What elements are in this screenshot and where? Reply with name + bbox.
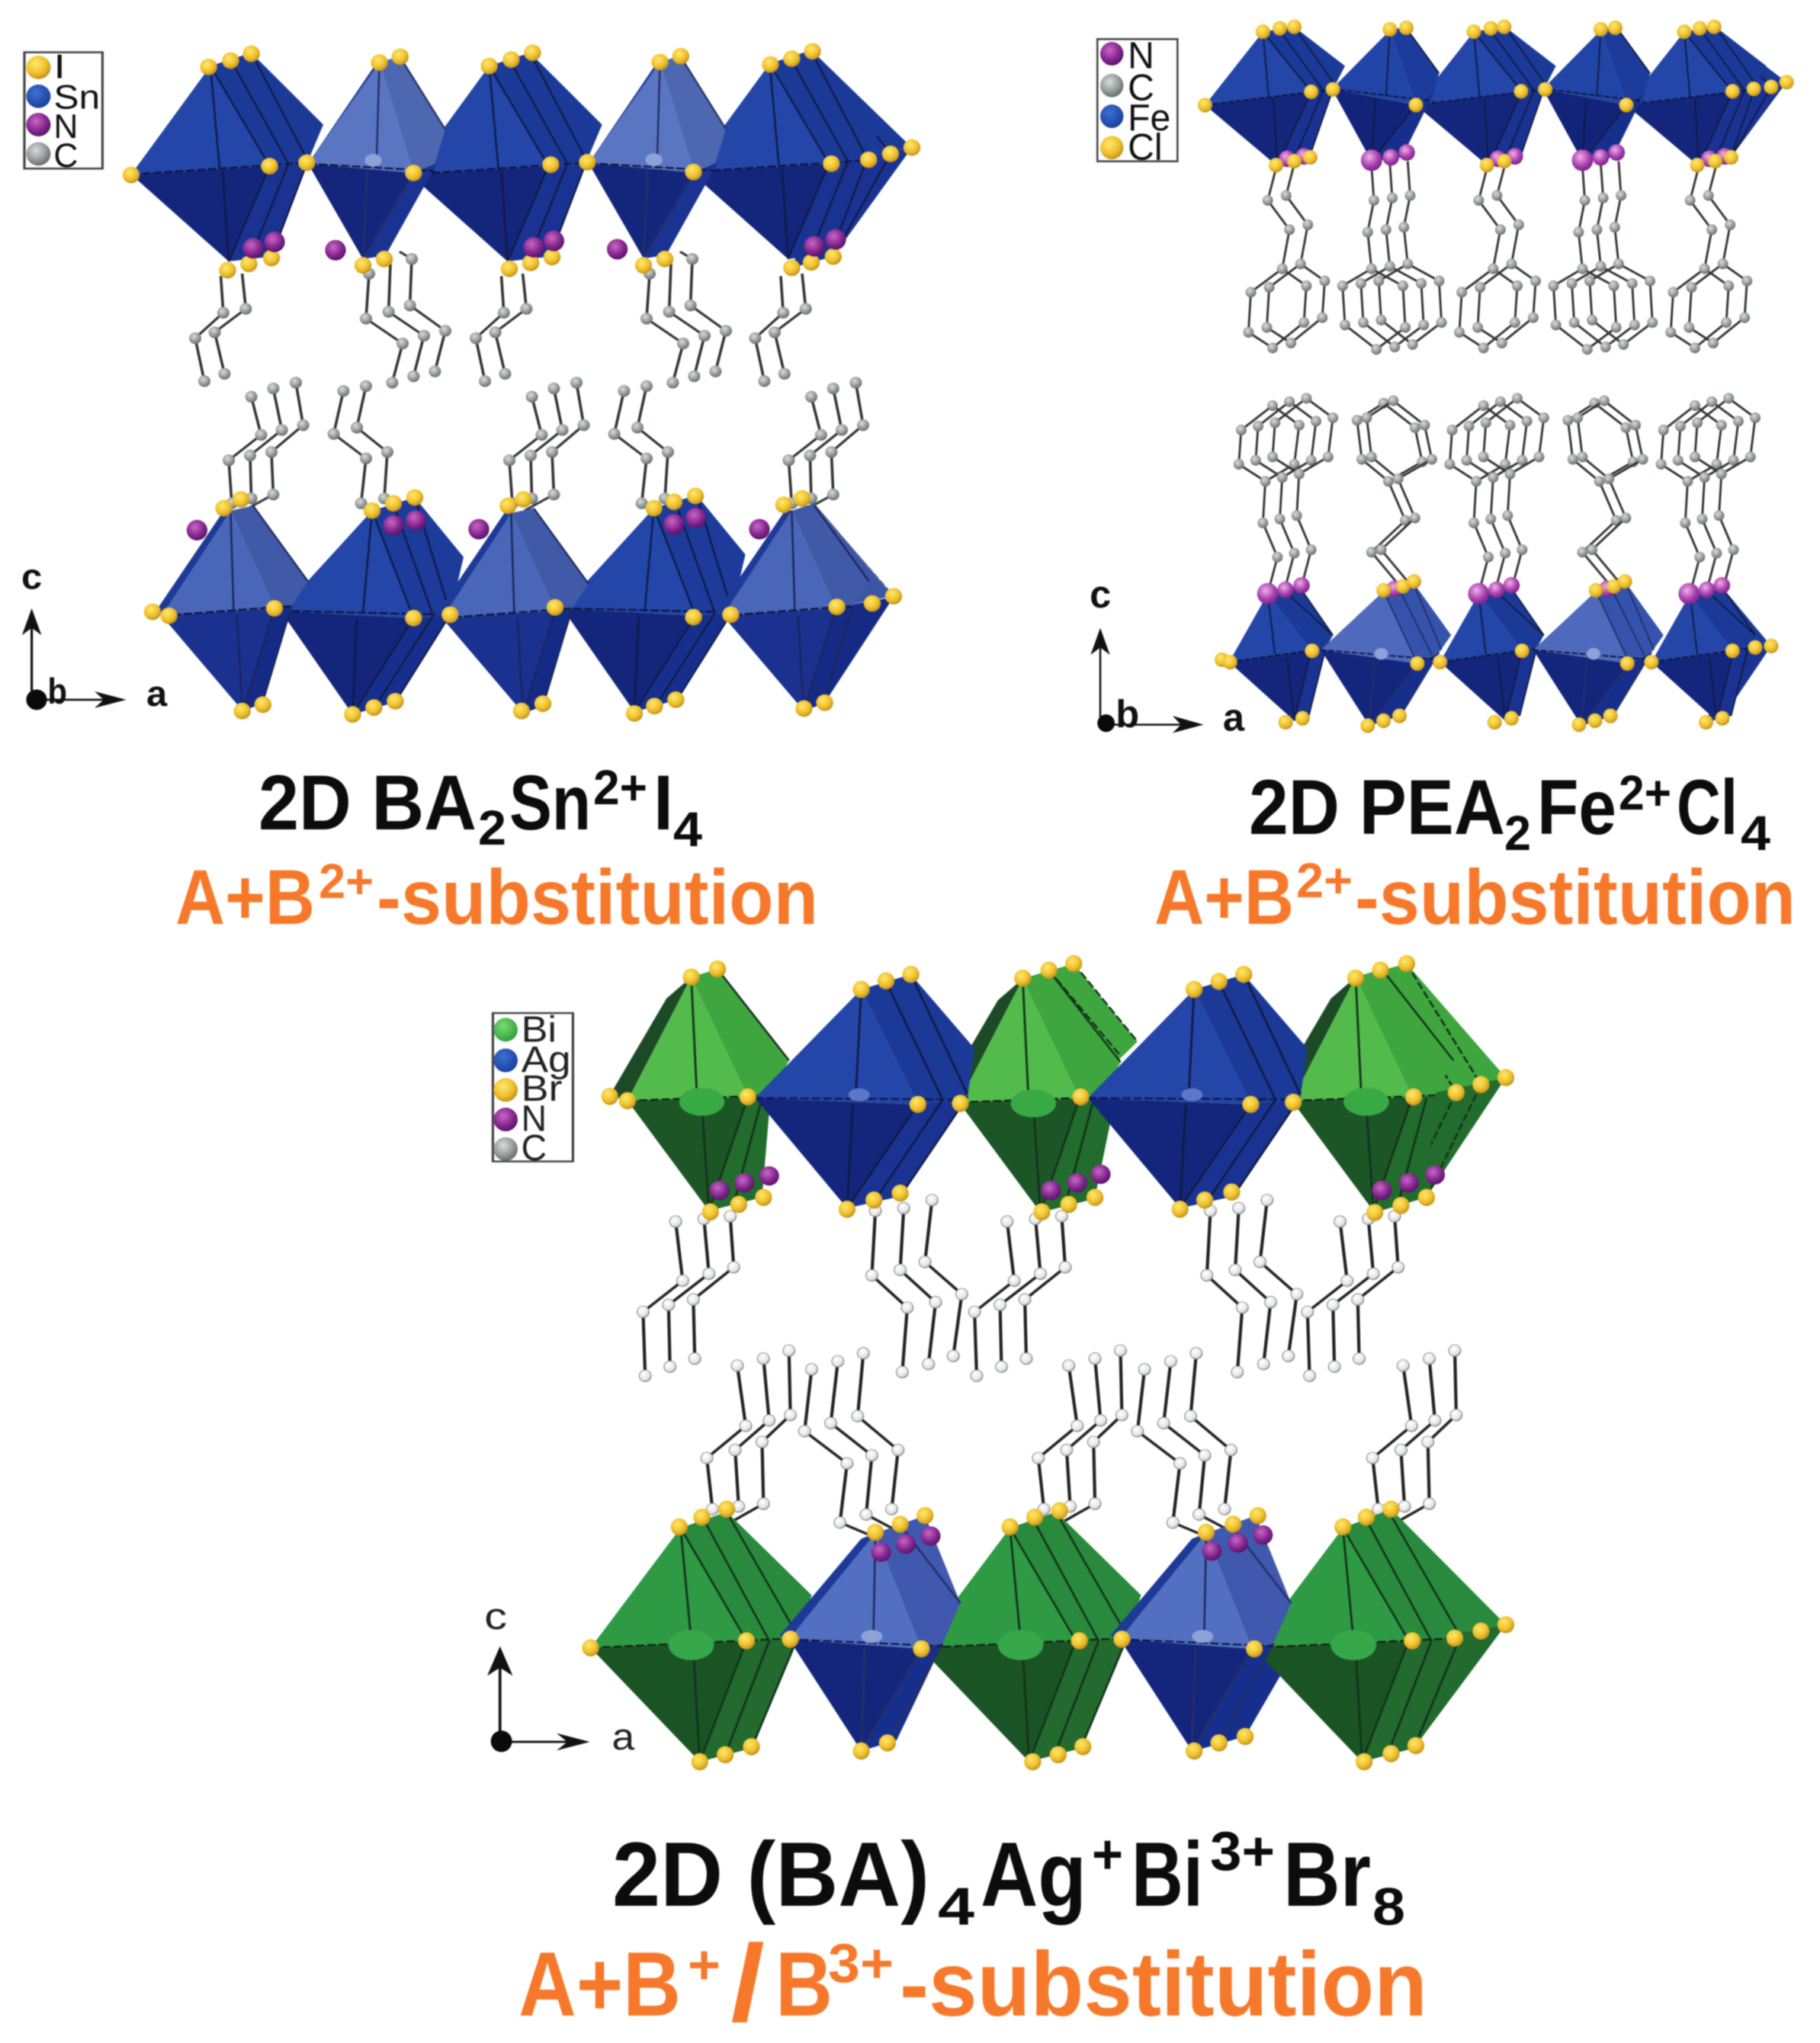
subheading: A+B2+-substitution (left) — [175, 854, 818, 941]
octahedra top row — [610, 964, 1506, 1213]
heading: 2D BA2Sn2+I4: 2+ — [593, 760, 647, 815]
subheading: A+B2+-substitution (right): -substitution — [1355, 854, 1796, 941]
subheading: A+B2+-substitution (right) — [1154, 853, 1796, 941]
legend: I Sn N C: I — [53, 47, 66, 85]
heading: 2D (BA)4Ag+Bi3+Br8: Br — [1283, 1823, 1371, 1926]
legend: N C Fe Cl: Cl — [1128, 127, 1163, 168]
heading: 2D BA2Sn2+I4: 2 — [478, 800, 506, 855]
octahedra bottom row — [591, 1509, 1506, 1762]
legend: Bi Ag Br N C: Bi — [522, 1009, 557, 1050]
legend: N C Fe Cl: C — [1128, 67, 1154, 108]
heading: 2D (BA)4Ag+Bi3+Br8: 8 — [1372, 1877, 1405, 1936]
heading: 2D (BA)4Ag+Bi3+Br8: Ag — [981, 1823, 1087, 1926]
octahedra bottom row — [1229, 582, 1771, 726]
nitrogen atoms — [710, 1165, 1445, 1562]
legend: I Sn N C: N — [53, 107, 78, 145]
butylammonium chains — [637, 1195, 1462, 1536]
subheading: A+B2+-substitution (left): -substitution — [377, 854, 818, 941]
axes: c, a: c — [484, 1596, 507, 1637]
axes: c, b, a: a — [146, 674, 168, 714]
heading: 2D PEA2Fe2+Cl4 — [1249, 764, 1770, 861]
subheading: A+B+/B3+-substitution: 3+ — [828, 1933, 894, 1994]
axes: c, a: a — [612, 1716, 635, 1758]
heading: 2D PEA2Fe2+Cl4: 2D PEA — [1249, 764, 1505, 851]
heading: 2D BA2Sn2+I4: 2D BA — [258, 759, 477, 846]
chlorine atoms — [1198, 20, 1794, 733]
subheading: A+B+/B3+-substitution — [518, 1921, 1427, 2043]
panel: BA4AgBiBr8 crystal structure — [484, 955, 1514, 1770]
heading: 2D (BA)4Ag+Bi3+Br8: 2D (BA) — [612, 1823, 929, 1926]
nitrogen atoms — [187, 229, 846, 540]
legend: Bi Ag Br N C — [493, 1009, 573, 1168]
octahedra top row — [1205, 27, 1786, 166]
legend: N C Fe Cl: N — [1128, 35, 1154, 77]
heading: 2D (BA)4Ag+Bi3+Br8: 4 — [938, 1877, 974, 1936]
bromine atoms — [583, 955, 1514, 1770]
octahedra bottom row — [154, 495, 894, 714]
panel: PEA2FeCl4 crystal structure — [1090, 20, 1794, 739]
heading: 2D PEA2Fe2+Cl4: Cl — [1677, 764, 1738, 851]
heading: 2D (BA)4Ag+Bi3+Br8: 3+ — [1210, 1821, 1275, 1882]
axes: c, b, a: b — [1115, 692, 1139, 736]
panel: BA2SnI4 crystal structure — [21, 43, 920, 723]
subheading: A+B2+-substitution (right): 2+ — [1296, 853, 1353, 908]
legend: Bi Ag Br N C: C — [522, 1127, 547, 1168]
legend: I Sn N C: C — [53, 136, 78, 175]
heading: 2D PEA2Fe2+Cl4: 2+ — [1619, 765, 1671, 820]
axes: c, b, a: a — [1223, 695, 1245, 739]
axes: c, b, a: b — [47, 672, 67, 712]
axes: c, a — [484, 1596, 635, 1758]
organic chains — [189, 252, 869, 511]
axes: c, b, a — [1090, 572, 1245, 739]
heading: 2D PEA2Fe2+Cl4: 4 — [1741, 806, 1770, 861]
axes: c, b, a: c — [21, 556, 42, 597]
nitrogen atoms — [1257, 144, 1733, 605]
heading: 2D BA2Sn2+I4 — [258, 759, 702, 857]
legend: I Sn N C: Sn — [53, 78, 100, 116]
subheading: A+B+/B3+-substitution: -substitution — [900, 1933, 1427, 2035]
heading: 2D PEA2Fe2+Cl4: 2 — [1504, 806, 1531, 861]
octahedra top row — [131, 50, 912, 268]
heading: 2D PEA2Fe2+Cl4: Fe — [1537, 764, 1616, 851]
legend: Bi Ag Br N C: N — [522, 1098, 547, 1139]
legend: I Sn N C — [24, 47, 102, 175]
subheading: A+B2+-substitution (right): A+B — [1154, 854, 1294, 941]
iodine atoms — [123, 43, 920, 723]
heading: 2D BA2Sn2+I4: Sn — [509, 759, 591, 846]
legend: Bi Ag Br N C: Ag — [522, 1038, 571, 1079]
legend: N C Fe Cl: Fe — [1128, 98, 1170, 139]
axes: c, b, a — [21, 556, 168, 714]
heading: 2D BA2Sn2+I4: I — [653, 759, 673, 846]
axes: c, b, a: c — [1090, 572, 1111, 616]
subheading: A+B2+-substitution (left): 2+ — [319, 854, 374, 909]
subheading: A+B+/B3+-substitution: A+B — [518, 1933, 681, 2035]
subheading: A+B+/B3+-substitution: + — [688, 1935, 721, 1996]
subheading: A+B2+-substitution (left): A+B — [175, 854, 315, 941]
heading: 2D (BA)4Ag+Bi3+Br8: Bi — [1131, 1823, 1203, 1926]
heading: 2D (BA)4Ag+Bi3+Br8 — [612, 1821, 1405, 1936]
legend: N C Fe Cl — [1097, 35, 1177, 168]
heading: 2D (BA)4Ag+Bi3+Br8: + — [1092, 1824, 1123, 1885]
subheading: A+B+/B3+-substitution: B — [775, 1933, 833, 2035]
heading: 2D BA2Sn2+I4: 4 — [673, 802, 702, 857]
phenethylammonium chains — [1234, 162, 1761, 594]
legend: Bi Ag Br N C: Br — [522, 1067, 562, 1108]
